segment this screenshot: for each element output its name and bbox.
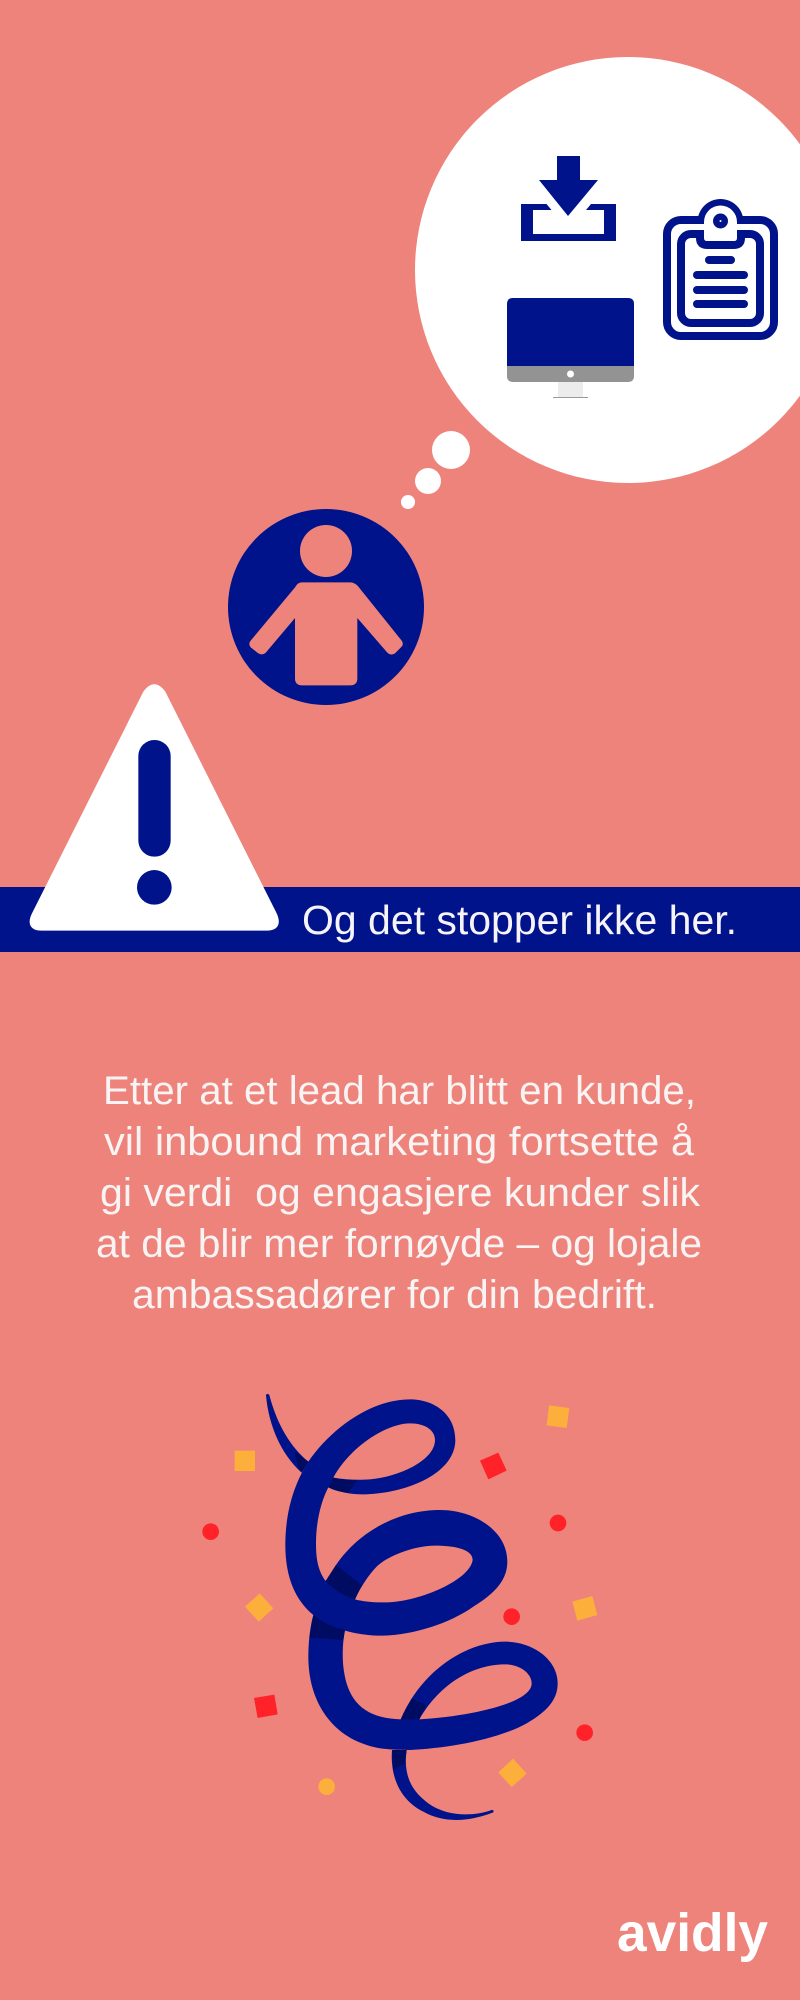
body text: gi verdi og engasjere kunder slik [100,1171,701,1215]
ribbon: upper loops [285,1399,507,1636]
body text: at de blir mer fornøyde – og lojale [96,1222,702,1266]
confetti ribbon illustration [202,1394,597,1820]
icon: person in circle [228,509,424,705]
body text: ambassadører for din bedrift. [132,1273,657,1317]
thought bubble [401,57,800,509]
banner [0,887,800,952]
icon: warning triangle [30,684,279,931]
icon: desktop monitor [507,298,634,398]
icon: download [521,156,616,241]
ribbon: overlap shading [295,1452,426,1770]
ribbon: top tail [266,1394,308,1473]
body text: vil inbound marketing fortsette å [104,1120,695,1164]
body text: Etter at et lead har blitt en kunde, [103,1069,696,1113]
ribbon: lower loop [308,1615,558,1750]
body text [96,1069,702,1317]
banner: Og det stopper ikke her. [302,897,737,943]
ribbon: bottom tail [392,1750,493,1820]
confetti: red pieces [202,1453,593,1741]
logo: avidly: avidly [617,1903,768,1963]
confetti: orange pieces [235,1405,597,1795]
icon: clipboard [667,199,774,336]
